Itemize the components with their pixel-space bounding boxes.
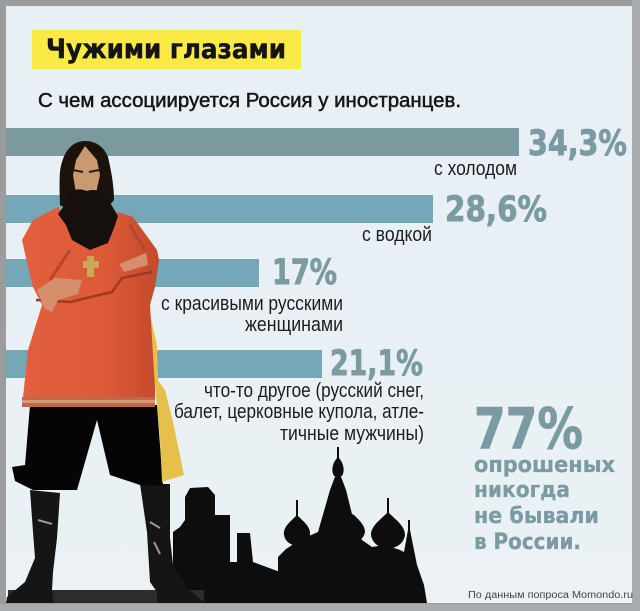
bar: women 17%: 17%: [272, 253, 337, 293]
bar: vodka 28,6%: [6, 190, 547, 246]
title: Чужими глазами: [46, 34, 286, 65]
bar: women 17%: [6, 253, 343, 336]
hands: [37, 253, 148, 312]
callout: 77%: [474, 397, 615, 555]
belt tassel: [140, 300, 184, 482]
callout: 77%: 77%: [474, 397, 583, 462]
beard: [58, 189, 118, 250]
callout: 77%: в России.: [474, 530, 581, 555]
source note: По данным попроса Momondo.ru: [468, 590, 633, 601]
bar: women 17%: женщинами: [245, 314, 343, 336]
cross pendant: [83, 256, 99, 277]
callout: 77%: опрошеных: [474, 453, 615, 478]
bar: vodka 28,6%: 28,6%: [445, 190, 547, 230]
skyline silhouette: [173, 447, 427, 603]
bar: cold 34,3%: с холодом: [434, 158, 517, 180]
bar: women 17%: с красивыми русскими: [161, 293, 343, 315]
hair: [60, 141, 114, 212]
bar: other 21,1%: балет, церковные купола, атле-: [174, 401, 424, 423]
figure: man in red shirt: [6, 141, 204, 603]
shirt: [22, 207, 159, 407]
face: [73, 146, 100, 197]
subtitle: С чем ассоциируется Россия у иностранцев.: [38, 90, 461, 112]
bar: cold 34,3%: [6, 124, 627, 180]
ground shadow: [8, 590, 204, 603]
bar: vodka 28,6%: с водкой: [362, 224, 432, 246]
callout: 77%: никогда: [474, 478, 570, 503]
callout: 77%: не бывали: [474, 504, 599, 529]
bar: other 21,1%: [6, 344, 424, 445]
trousers: [12, 405, 163, 490]
bar: other 21,1%: что-то другое (русский снег,: [204, 380, 424, 402]
bar: other 21,1%: тичные мужчины): [280, 423, 424, 445]
bar: other 21,1%: 21,1%: [330, 344, 423, 384]
boots: [6, 484, 204, 603]
